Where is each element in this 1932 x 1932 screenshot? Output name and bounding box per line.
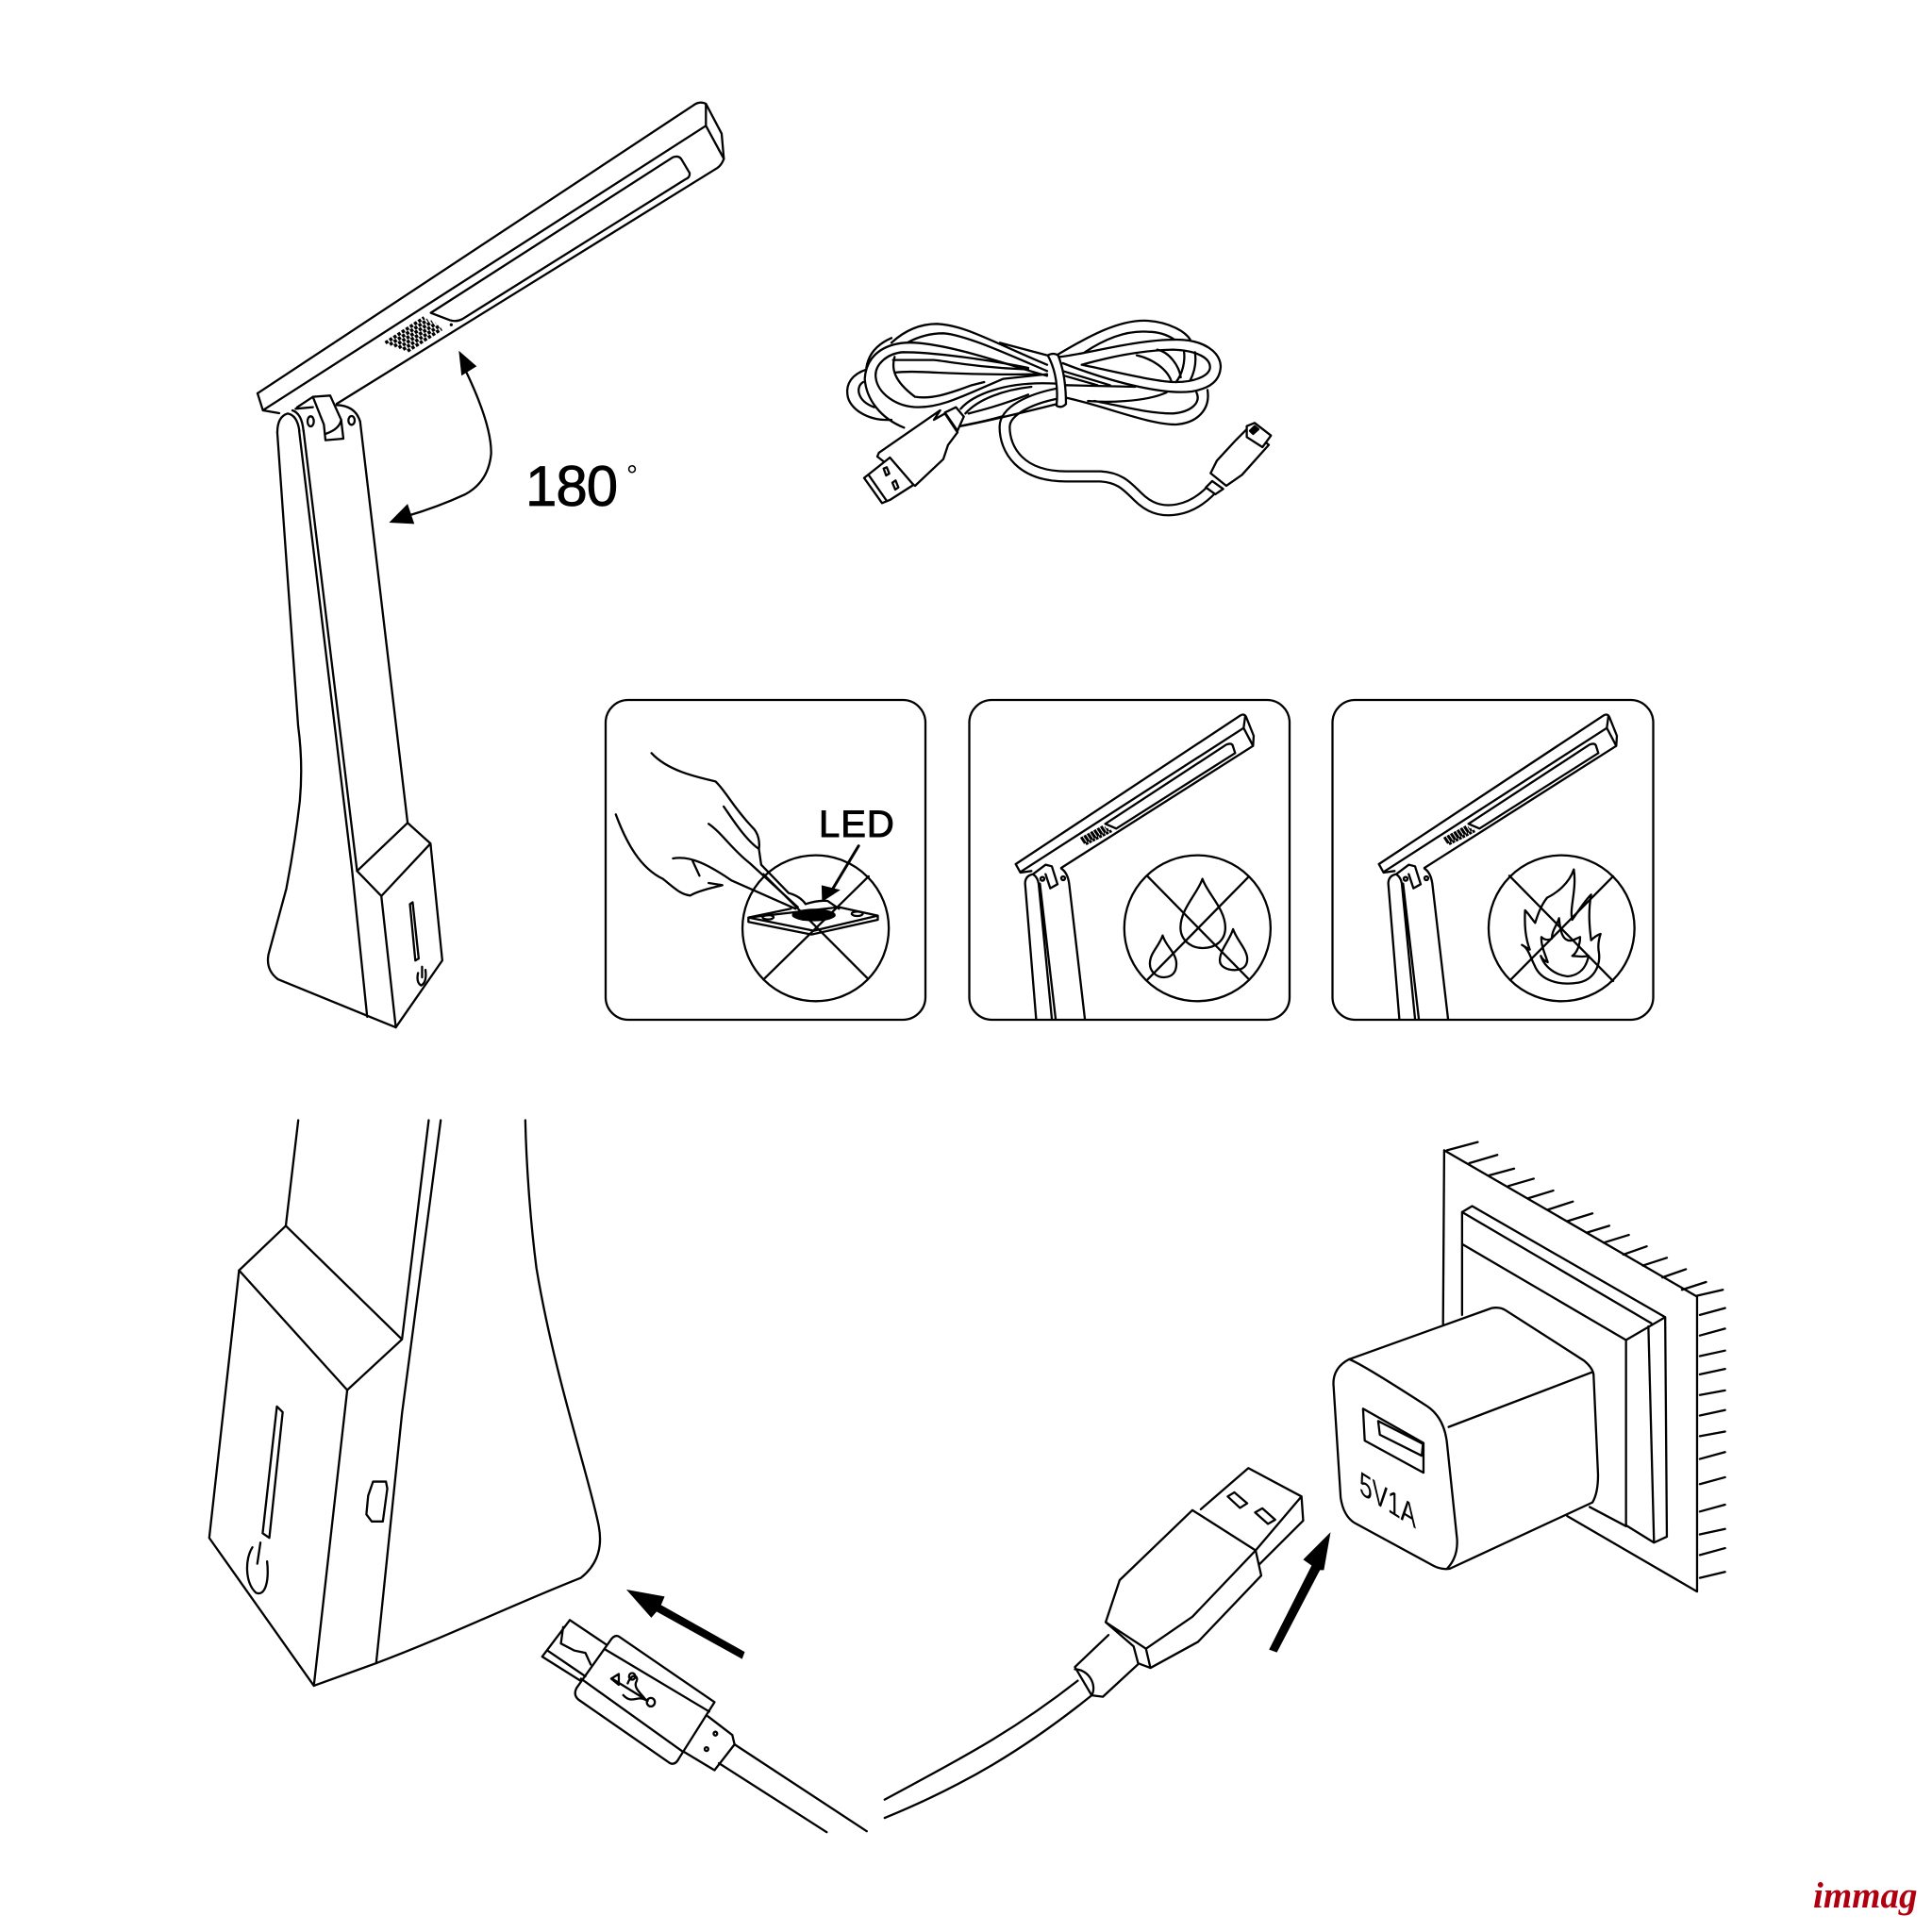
charger bbox=[1333, 1307, 1598, 1569]
lamp view bbox=[1016, 714, 1254, 1019]
icon: do not touch LED bbox=[616, 753, 889, 1001]
panel: keep away from water bbox=[970, 700, 1290, 1020]
wall bbox=[1443, 1150, 1697, 1591]
lamp arm bbox=[258, 103, 724, 413]
USB A plug bbox=[1201, 1468, 1303, 1564]
prohibition circle bbox=[742, 856, 889, 1001]
wall hatching bbox=[1447, 1142, 1725, 1578]
socket plate bbox=[1462, 1207, 1667, 1542]
power icon bbox=[247, 1542, 268, 1593]
label: 180 degrees: ° bbox=[626, 460, 638, 491]
panel: keep away from fire bbox=[1332, 700, 1653, 1020]
lamp view bbox=[1379, 714, 1617, 1019]
label: 5V1A: 5V1A bbox=[1359, 1463, 1416, 1537]
cable tie bbox=[1048, 354, 1066, 407]
illustration: lamp base close-up bbox=[209, 1120, 600, 1686]
label: LED: LED bbox=[819, 804, 895, 845]
cable coil right bbox=[1057, 321, 1221, 425]
speaker holes bbox=[386, 313, 441, 358]
lamp base block bbox=[358, 823, 442, 1027]
slot and power icon bbox=[410, 902, 425, 986]
charger USB port bbox=[1363, 1408, 1424, 1473]
LED plate bbox=[748, 908, 878, 935]
cable coil left bbox=[847, 324, 1057, 427]
cable tail bbox=[960, 393, 1212, 510]
slot bbox=[262, 1407, 283, 1538]
icon: no water drops bbox=[1124, 856, 1271, 1001]
arrow: into lamp bbox=[626, 1590, 744, 1659]
label: 180 degrees: 180 bbox=[525, 455, 617, 518]
hand bbox=[616, 753, 806, 908]
arrow: into charger bbox=[1269, 1532, 1330, 1653]
illustration: desk lamp with rotating arm bbox=[258, 103, 724, 1027]
icon: no fire bbox=[1489, 856, 1635, 1001]
USB symbol bbox=[611, 1674, 648, 1701]
hinge bbox=[277, 395, 360, 441]
illustration: coiled USB cable bbox=[847, 321, 1271, 510]
arrow to LED bbox=[832, 846, 858, 890]
USB plug bbox=[864, 408, 964, 503]
arrow: rotation arc bbox=[389, 351, 491, 524]
illustration: USB plug, charger and wall socket bbox=[885, 1142, 1725, 1818]
panel: LED warning bbox=[606, 700, 925, 1020]
lamp stand body bbox=[268, 422, 442, 1027]
logo: immag: immag bbox=[1813, 1875, 1918, 1916]
micro USB connector and cable bbox=[542, 1620, 867, 1832]
block top bbox=[239, 1120, 441, 1686]
micro USB plug bbox=[1206, 423, 1271, 494]
micro USB port bbox=[366, 1482, 388, 1522]
base outline bbox=[209, 1120, 600, 1686]
